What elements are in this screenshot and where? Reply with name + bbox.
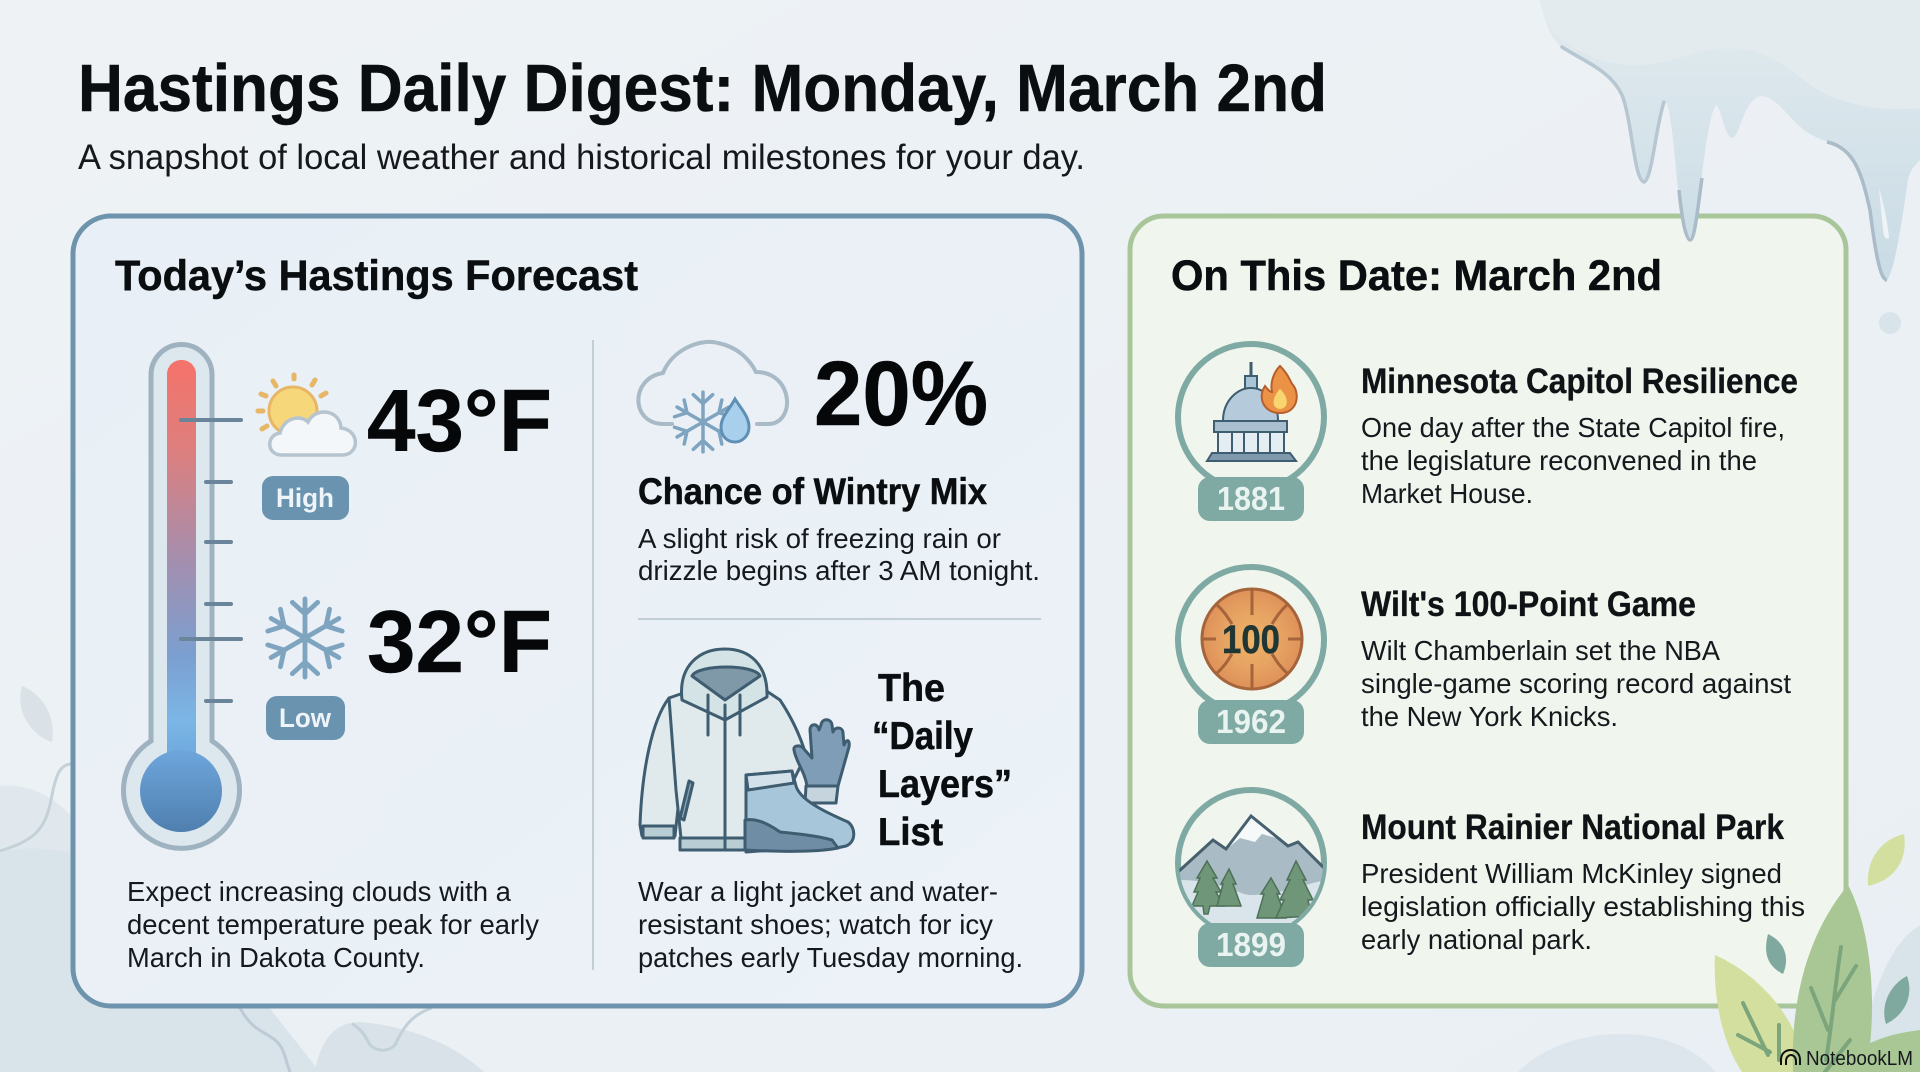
icon: snowflake bbox=[265, 599, 345, 677]
text: wintry mix detail: drizzle begins after 3 AM tonight. bbox=[638, 555, 1040, 586]
text: temperature summary: Expect increasing clouds with a bbox=[127, 876, 511, 907]
badge: high bbox=[262, 476, 349, 520]
boot bbox=[745, 771, 854, 852]
badge: 1899 bbox=[1198, 923, 1304, 967]
title: Hastings Daily Digest: Monday, March 2nd bbox=[78, 51, 1327, 126]
text: wintry mix detail bbox=[638, 523, 1040, 586]
text: temperature summary: March in Dakota County. bbox=[127, 942, 425, 973]
icon: basketball 100 bbox=[1178, 567, 1324, 713]
text: wilt item bbox=[1361, 585, 1791, 732]
text: layers advice: resistant shoes; watch for icy bbox=[638, 909, 993, 940]
text: temperature summary: decent temperature peak for early bbox=[127, 909, 539, 940]
subheading: wintry mix: Chance of Wintry Mix bbox=[638, 471, 987, 512]
decoration: leaves bottom right bbox=[1715, 834, 1920, 1072]
text: wilt item: the New York Knicks. bbox=[1361, 701, 1618, 732]
milestone: 1962 bbox=[1178, 567, 1791, 744]
icon: jacket, glove and boot bbox=[640, 649, 854, 852]
panel: on this date bbox=[1130, 216, 1846, 1006]
text: capitol item: One day after the State Capitol fire, bbox=[1361, 412, 1785, 443]
text: rainier item: early national park. bbox=[1361, 924, 1592, 955]
big number: high temperature: 43°F bbox=[367, 371, 552, 470]
text: layers advice: patches early Tuesday morning. bbox=[638, 942, 1023, 973]
icon: cloud with snowflake and raindrop bbox=[638, 342, 787, 452]
subheading: daily layers list: “Daily bbox=[872, 715, 973, 758]
subheading: daily layers list: Layers” bbox=[878, 763, 1012, 806]
text: temperature summary bbox=[127, 876, 539, 973]
chart: thermometer bbox=[123, 344, 241, 848]
big number: precipitation chance: 20% bbox=[814, 343, 988, 445]
icon: capitol on fire bbox=[1178, 344, 1324, 490]
icon: sun behind cloud bbox=[258, 375, 355, 455]
text: rainier item: legislation officially establishing this bbox=[1361, 891, 1805, 922]
text: rainier item: Mount Rainier National Park bbox=[1361, 808, 1784, 847]
text: wilt item: Wilt's 100-Point Game bbox=[1361, 585, 1696, 624]
text: capitol item: Minnesota Capitol Resilience bbox=[1361, 362, 1798, 401]
decoration: icicles top right bbox=[1540, 0, 1920, 334]
glove bbox=[794, 720, 849, 803]
badge: low bbox=[266, 696, 345, 740]
text: layers advice bbox=[638, 876, 1023, 973]
big number: low temperature: 32°F bbox=[367, 592, 552, 691]
icon: mountain and trees bbox=[1178, 790, 1326, 940]
milestone: 1899 bbox=[1178, 790, 1805, 967]
badge: 1881 bbox=[1198, 477, 1304, 521]
milestone: 1881 bbox=[1178, 344, 1798, 521]
text: wilt item: Wilt Chamberlain set the NBA bbox=[1361, 635, 1720, 666]
background: frost blobs lower left bbox=[0, 686, 1920, 1072]
subtitle: A snapshot of local weather and historical milestones for your day. bbox=[78, 138, 1085, 177]
text: wilt item: single-game scoring record against bbox=[1361, 668, 1791, 699]
badge: 1962 bbox=[1198, 700, 1304, 744]
text: capitol item: the legislature reconvened in the bbox=[1361, 445, 1757, 476]
text: rainier item bbox=[1361, 808, 1805, 955]
badge: 1962: 1962 bbox=[1216, 703, 1286, 740]
badge: 1881: 1881 bbox=[1217, 480, 1285, 517]
badge: low: Low bbox=[279, 703, 332, 733]
subheading: daily layers list: The bbox=[878, 667, 945, 710]
jacket bbox=[640, 649, 806, 850]
text: wintry mix detail: A slight risk of freezing rain or bbox=[638, 523, 1001, 554]
text: rainier item: President William McKinley signed bbox=[1361, 858, 1782, 889]
heading: forecast: Today’s Hastings Forecast bbox=[115, 252, 638, 300]
subheading: daily layers list: List bbox=[878, 811, 943, 854]
badge: high: High bbox=[276, 483, 334, 513]
badge: 1899: 1899 bbox=[1216, 926, 1286, 963]
panel: today's forecast bbox=[73, 216, 1082, 1006]
watermark: NotebookLM: NotebookLM bbox=[1806, 1048, 1913, 1070]
icon: basketball 100: 100 bbox=[1222, 618, 1280, 662]
text: capitol item bbox=[1361, 362, 1798, 509]
heading: on this date: On This Date: March 2nd bbox=[1171, 252, 1662, 300]
text: capitol item: Market House. bbox=[1361, 478, 1533, 509]
subheading: daily layers list bbox=[872, 667, 1012, 854]
text: layers advice: Wear a light jacket and water- bbox=[638, 876, 998, 907]
